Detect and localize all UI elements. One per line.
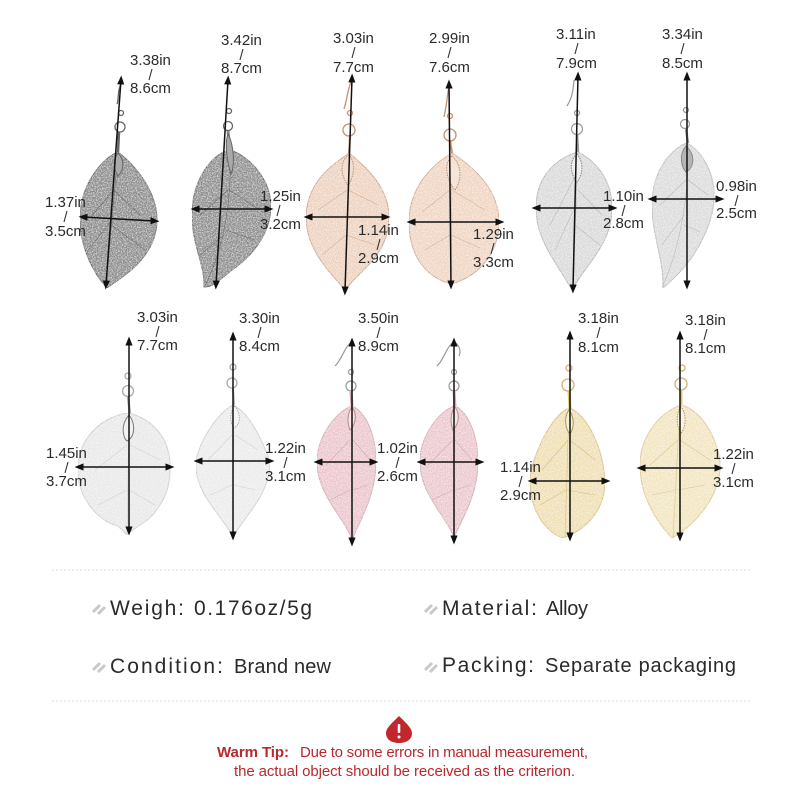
leaf [420, 406, 478, 538]
height arrow [569, 335, 571, 537]
width arrow [308, 216, 386, 218]
panel: specifications [93, 597, 736, 678]
height label: 8.7cm [221, 60, 262, 77]
height label [221, 32, 262, 77]
width arrow [641, 467, 719, 469]
height label: 3.18in [578, 310, 619, 327]
spec: condition [93, 655, 332, 678]
height label: 3.18in [685, 312, 726, 329]
hook and rings [122, 373, 134, 414]
width label: 2.9cm [358, 250, 399, 267]
height label: 3.42in [221, 32, 262, 49]
width arrow [421, 461, 480, 463]
warm tip text: Due to some errors in manual measurement, [300, 744, 588, 761]
width label: 1.25in [260, 188, 301, 205]
height arrow [351, 342, 353, 542]
height label [578, 310, 619, 356]
earring 1: dark grey [45, 52, 171, 288]
width arrow [195, 208, 269, 210]
height label [358, 310, 399, 355]
leaf [196, 405, 270, 537]
width label [716, 178, 757, 222]
leaf [530, 408, 605, 538]
height label [239, 310, 280, 355]
height label [662, 26, 703, 72]
width arrow [198, 460, 270, 462]
width label: 1.45in [46, 445, 87, 462]
warm tip text: Warm Tip: [217, 744, 289, 761]
hook and rings [567, 80, 582, 152]
earring 8: white silver [196, 310, 306, 537]
hook and rings [562, 365, 574, 408]
width label: 2.8cm [603, 215, 644, 232]
width label [265, 440, 306, 485]
height label [429, 30, 470, 76]
earring 6: silver [652, 26, 757, 288]
width arrow [411, 221, 500, 223]
height label [333, 30, 374, 76]
leaf [317, 406, 376, 540]
hook and rings [444, 86, 456, 153]
height label: 8.6cm [130, 80, 171, 97]
width label [46, 445, 87, 490]
hook and rings [680, 108, 690, 143]
height arrow [686, 76, 688, 285]
width label: 3.1cm [713, 474, 754, 491]
height label: 3.30in [239, 310, 280, 327]
leaf [409, 153, 499, 284]
height label: 3.11in [556, 26, 596, 43]
height label: 8.9cm [358, 338, 399, 355]
width label [45, 194, 86, 240]
width label: 0.98in [716, 178, 757, 195]
height label: 8.1cm [578, 339, 619, 356]
leaf [80, 152, 157, 288]
width label: 2.5cm [716, 205, 757, 222]
height label: 7.7cm [333, 59, 374, 76]
height arrow [453, 342, 455, 540]
earring 10: pink [420, 342, 480, 540]
height label: 8.4cm [239, 338, 280, 355]
hook and rings [343, 82, 355, 153]
height label: 7.6cm [429, 59, 470, 76]
earring 4: rose gold [409, 30, 514, 285]
height label: 7.7cm [137, 337, 178, 354]
spec: packing: Packing: [442, 654, 534, 677]
width label: 1.37in [45, 194, 86, 211]
spec: material: Material: [442, 597, 537, 620]
height label: 3.03in [333, 30, 374, 47]
leaf [536, 152, 612, 291]
hook and rings [224, 108, 232, 150]
leaf [640, 405, 720, 538]
height label: 3.50in [358, 310, 399, 327]
height arrow [106, 80, 121, 285]
width label [260, 188, 301, 233]
height label [130, 52, 171, 97]
width label: 1.22in [713, 446, 754, 463]
earring 5: silver [536, 26, 644, 291]
height label [685, 312, 726, 357]
earring 2: dark grey [192, 32, 301, 287]
width label: 3.5cm [45, 223, 86, 240]
width label: 1.10in [603, 188, 644, 205]
spec: packing: Separate packaging [545, 655, 736, 677]
leaf [78, 413, 170, 535]
earring 3: rose gold [306, 30, 399, 292]
earring 11: gold [500, 310, 619, 538]
height arrow [216, 80, 228, 285]
width arrow [79, 466, 170, 468]
hook and rings [437, 342, 460, 406]
warm tip text: the actual object should be received as the criterion. [234, 763, 575, 780]
width arrow [83, 217, 155, 221]
width arrow [532, 480, 606, 482]
height arrow [449, 84, 451, 285]
height arrow [573, 76, 578, 289]
hook and rings [227, 364, 237, 405]
width label [713, 446, 754, 491]
height label: 2.99in [429, 30, 470, 47]
spec: weight: Weigh: [110, 597, 184, 620]
spec: weight [93, 597, 312, 620]
width label: 3.1cm [265, 468, 306, 485]
leaf [652, 143, 714, 288]
width label [500, 459, 541, 504]
width label: 3.7cm [46, 473, 87, 490]
height label: 3.03in [137, 309, 178, 326]
height label [137, 309, 178, 354]
height arrow [679, 335, 681, 537]
width label: 1.02in [377, 440, 418, 457]
width label: 1.14in [358, 222, 399, 239]
width label: 1.22in [265, 440, 306, 457]
hook and rings [675, 365, 687, 405]
hook and rings [335, 342, 356, 406]
height label: 8.1cm [685, 340, 726, 357]
height label [556, 26, 597, 72]
width arrow [536, 207, 613, 209]
width label: 1.29in [473, 226, 514, 243]
width arrow [652, 198, 720, 200]
spec: condition: Brand new [234, 656, 332, 678]
width label: 2.6cm [377, 468, 418, 485]
hook and rings [115, 82, 125, 152]
earring 9: pink [317, 310, 418, 542]
spec: condition: Condition: [110, 655, 223, 678]
width label: 3.3cm [473, 254, 514, 271]
width label: 3.2cm [260, 216, 301, 233]
height label: 7.9cm [556, 55, 597, 72]
spec: weight: 0.176oz/5g [194, 597, 312, 620]
earring 12: gold [640, 312, 754, 538]
spec: material: Alloy [546, 598, 588, 620]
icon: warning drop [386, 716, 412, 743]
spec: packing [425, 654, 736, 677]
height arrow [345, 78, 352, 291]
earring 7: white silver [46, 309, 178, 535]
warm tip text [217, 744, 588, 780]
width label [358, 222, 399, 267]
width label: 1.14in [500, 459, 541, 476]
width label [603, 188, 644, 232]
width label [377, 440, 418, 485]
width arrow [318, 461, 374, 463]
leaf [306, 153, 389, 292]
leaf [192, 134, 271, 287]
height label: 8.5cm [662, 55, 703, 72]
height label: 3.38in [130, 52, 171, 69]
spec: material [425, 597, 588, 620]
width label [473, 226, 514, 271]
height arrow [232, 336, 234, 536]
height arrow [128, 341, 130, 531]
height label: 3.34in [662, 26, 703, 43]
width label: 2.9cm [500, 487, 541, 504]
